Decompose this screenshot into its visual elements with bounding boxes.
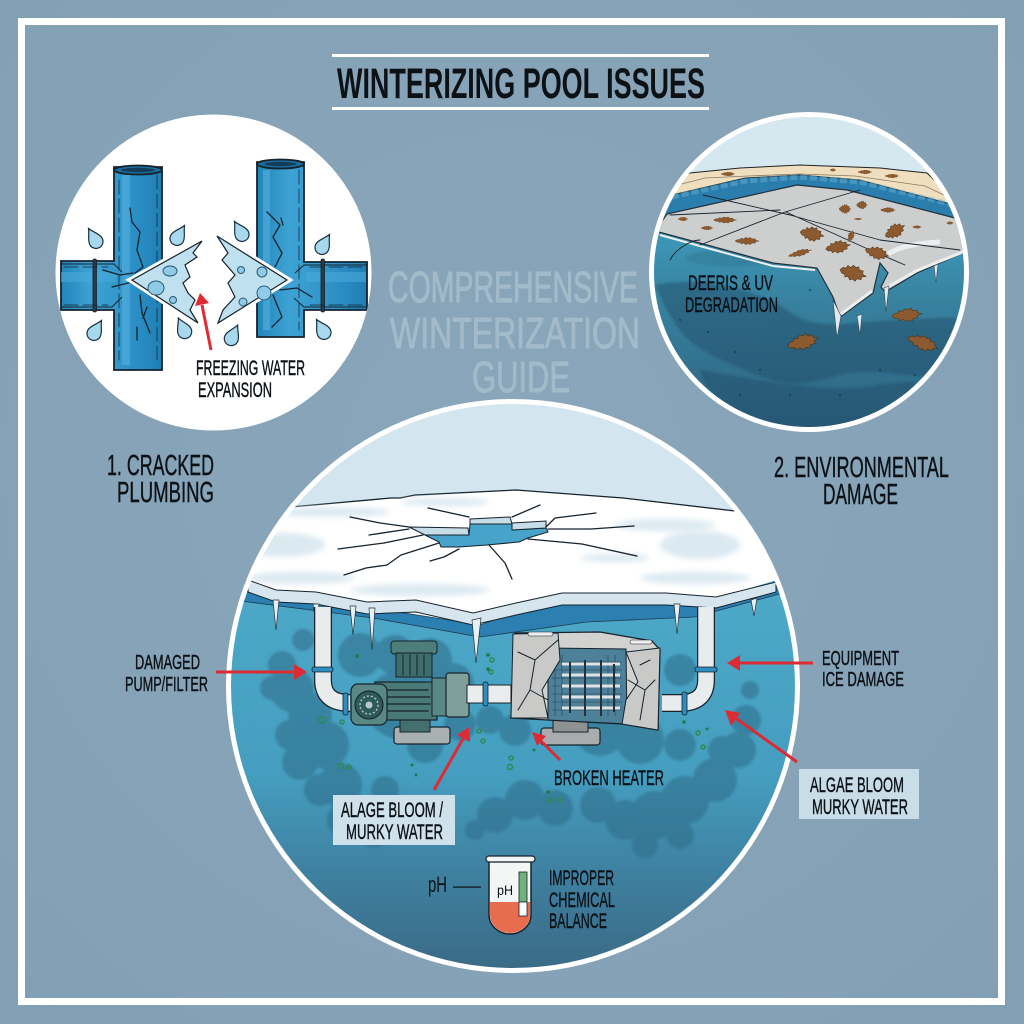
arrow: broken heater xyxy=(532,732,560,760)
pool cover xyxy=(655,185,970,317)
label: equipment ice damage xyxy=(822,648,904,691)
faded subtitle: COMPREHENSIVE xyxy=(388,263,638,312)
label: debris and uv degradation: DEGRADATION xyxy=(685,294,778,317)
sky xyxy=(282,404,744,525)
faded subtitle xyxy=(388,263,640,402)
arrow: damaged pump filter xyxy=(216,664,307,680)
heading: environmental damage xyxy=(774,452,949,511)
label: debris and uv degradation: DEERIS & UV xyxy=(688,272,773,295)
label: alage bloom left: MURKY WATER xyxy=(346,821,443,844)
label: ph: pH xyxy=(428,872,447,897)
panel: cracked plumbing xyxy=(56,114,372,430)
snow on ice cover xyxy=(282,490,744,525)
icon: right ice shard xyxy=(217,236,287,323)
left plumbing pipe xyxy=(312,607,350,715)
leaves xyxy=(678,168,954,355)
label: equipment ice damage: EQUIPMENT xyxy=(822,648,899,670)
label: equipment ice damage: ICE DAMAGE xyxy=(822,669,904,691)
heading: cracked plumbing xyxy=(107,450,214,509)
icon: ph test tube xyxy=(486,856,535,934)
label: algae bloom right: ALGAE BLOOM xyxy=(810,774,904,797)
arrow: algae left xyxy=(434,727,470,790)
icicles xyxy=(833,264,938,338)
label: algae bloom right xyxy=(799,769,919,819)
label: improper chemical balance: IMPROPER xyxy=(549,867,614,890)
label: freezing water expansion xyxy=(196,357,305,402)
faded subtitle: GUIDE xyxy=(472,353,570,402)
label: damaged pump filter xyxy=(125,652,208,696)
label: improper chemical balance: CHEMICAL xyxy=(549,889,615,912)
title: WINTERIZING POOL ISSUES xyxy=(337,60,705,108)
icon: right cracked pipe xyxy=(257,160,367,337)
water xyxy=(220,570,810,980)
arrow: freezing water xyxy=(195,293,211,350)
water murk xyxy=(655,250,970,432)
tiny algae dots xyxy=(355,653,708,794)
heading: cracked plumbing: PLUMBING xyxy=(117,477,214,509)
label: broken heater: BROKEN HEATER xyxy=(554,767,664,790)
label: improper chemical balance xyxy=(549,867,615,933)
murky algae clouds xyxy=(260,629,761,858)
label: algae bloom right: MURKY WATER xyxy=(812,796,908,819)
ice crack hole xyxy=(338,505,637,579)
label: freezing water expansion: EXPANSION xyxy=(198,379,272,402)
snow shadows xyxy=(235,498,750,596)
algae specks xyxy=(319,658,705,802)
faded subtitle: WINTERIZATION xyxy=(390,309,640,358)
icon: water droplets xyxy=(82,218,336,348)
pool deck xyxy=(640,165,960,215)
label: ph xyxy=(428,872,481,897)
panel: main frozen pool xyxy=(125,395,919,980)
water xyxy=(654,225,964,427)
label: alage bloom left xyxy=(333,795,455,845)
label: damaged pump filter: DAMAGED xyxy=(135,652,200,674)
pool tile band xyxy=(640,175,965,225)
heading: cracked plumbing: 1. CRACKED xyxy=(107,450,214,482)
label: alage bloom left: ALAGE BLOOM / xyxy=(341,799,443,822)
label: debris and uv degradation xyxy=(685,272,778,317)
broken heater xyxy=(511,632,660,745)
arrow: equipment ice damage xyxy=(727,655,813,671)
icon: left ice shard xyxy=(132,241,202,323)
ice shelf edge xyxy=(248,580,776,625)
icicles xyxy=(273,598,757,663)
middle pipe xyxy=(467,682,511,706)
damaged pump xyxy=(351,641,469,744)
label: freezing water expansion: FREEZING WATER xyxy=(196,357,305,380)
icon: ph test tube: pH xyxy=(497,882,513,898)
label: improper chemical balance: BALANCE xyxy=(549,910,607,933)
title xyxy=(332,54,709,110)
heading: environmental damage: DAMAGE xyxy=(823,479,898,511)
right plumbing pipe xyxy=(662,607,717,715)
pool specks xyxy=(679,284,916,396)
arrow: algae right xyxy=(725,710,797,762)
pool wall tile band xyxy=(241,582,787,637)
panel: environmental damage xyxy=(640,110,980,440)
icon: left cracked pipe xyxy=(61,166,162,370)
label: damaged pump filter: PUMP/FILTER xyxy=(125,674,208,696)
